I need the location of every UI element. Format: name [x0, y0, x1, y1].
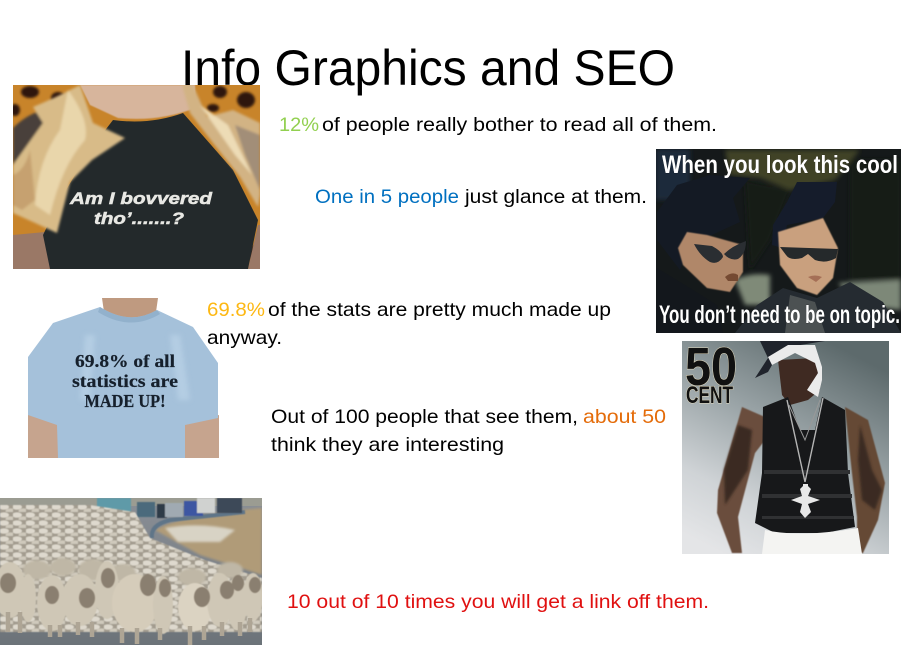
photo: 50 Cent in vest	[682, 337, 889, 554]
arm skin	[13, 225, 260, 269]
arms	[28, 412, 219, 458]
distant field	[155, 508, 262, 575]
photo: two men in sunglasses meme	[656, 149, 901, 333]
near sheep	[0, 561, 263, 634]
shirt text: MADE UP!	[84, 391, 166, 411]
shirt text: Am I bovvered	[69, 190, 213, 208]
white trousers	[762, 528, 862, 554]
text: one in 5 glance: just glance at them.	[464, 186, 647, 208]
top band	[0, 498, 262, 506]
text: 12% read: 12%	[279, 114, 319, 136]
photo: woman in "Am I bovvered" t-shirt: tho’.......?	[94, 210, 184, 228]
text: 69.8% made up: anyway.	[207, 327, 282, 349]
left man: jacket	[656, 268, 723, 333]
text: 69.8% made up: 69.8%	[207, 299, 265, 321]
skin: neck	[80, 85, 195, 119]
text: out of 100 people: about 50	[583, 406, 666, 428]
left man: face	[678, 232, 743, 292]
leopard spots	[10, 86, 260, 265]
shirt text: 69.8% of all	[75, 351, 175, 371]
hair right	[182, 85, 260, 207]
distant vehicles	[97, 498, 242, 518]
cap	[755, 341, 825, 378]
mid sheep	[23, 558, 243, 586]
text: out of 100 people	[271, 406, 666, 456]
sheep legs	[8, 612, 250, 645]
shirt text: statistics are	[72, 371, 178, 391]
shirt body	[28, 307, 218, 458]
tattoos	[724, 425, 882, 510]
bandana	[768, 345, 822, 397]
right man: hair	[772, 182, 837, 248]
text: out of 100 people: Out of 100 people that see them,	[271, 406, 578, 428]
logo: 50	[685, 337, 737, 397]
photo: flock of sheep on road	[0, 498, 263, 645]
guard rail	[152, 512, 245, 538]
text: 69.8% made up	[207, 299, 611, 349]
black t-shirt	[43, 113, 258, 269]
text: one in 5 glance: One in 5 people	[315, 186, 459, 208]
left man: hair	[657, 175, 750, 270]
photo: blue "69.8%" t-shirt	[28, 298, 219, 458]
neck and head	[778, 358, 820, 405]
right man: face	[778, 218, 838, 295]
text: 12% read: of people really bother to read all of them.	[322, 114, 717, 136]
text: out of 100 people: think they are interesting	[271, 434, 504, 456]
text: 10 out of 10: 10 out of 10 times you will get a link off them.	[287, 591, 709, 613]
hair left	[13, 85, 260, 233]
title: Info Graphics and SEO	[181, 40, 675, 96]
text: one in 5 glance	[315, 186, 647, 208]
arms	[717, 407, 885, 553]
chains and cross	[787, 398, 823, 482]
far flock	[0, 505, 262, 632]
neck	[102, 298, 158, 318]
right man: jacket	[735, 282, 901, 333]
text: 69.8% made up: of the stats are pretty much made up	[268, 299, 611, 321]
photo: woman in "Am I bovvered" t-shirt	[10, 85, 260, 269]
vest	[755, 397, 855, 533]
sheep faces	[0, 568, 261, 608]
shirt text	[72, 351, 178, 411]
photo: 50 Cent in vest: CENT	[686, 382, 733, 409]
